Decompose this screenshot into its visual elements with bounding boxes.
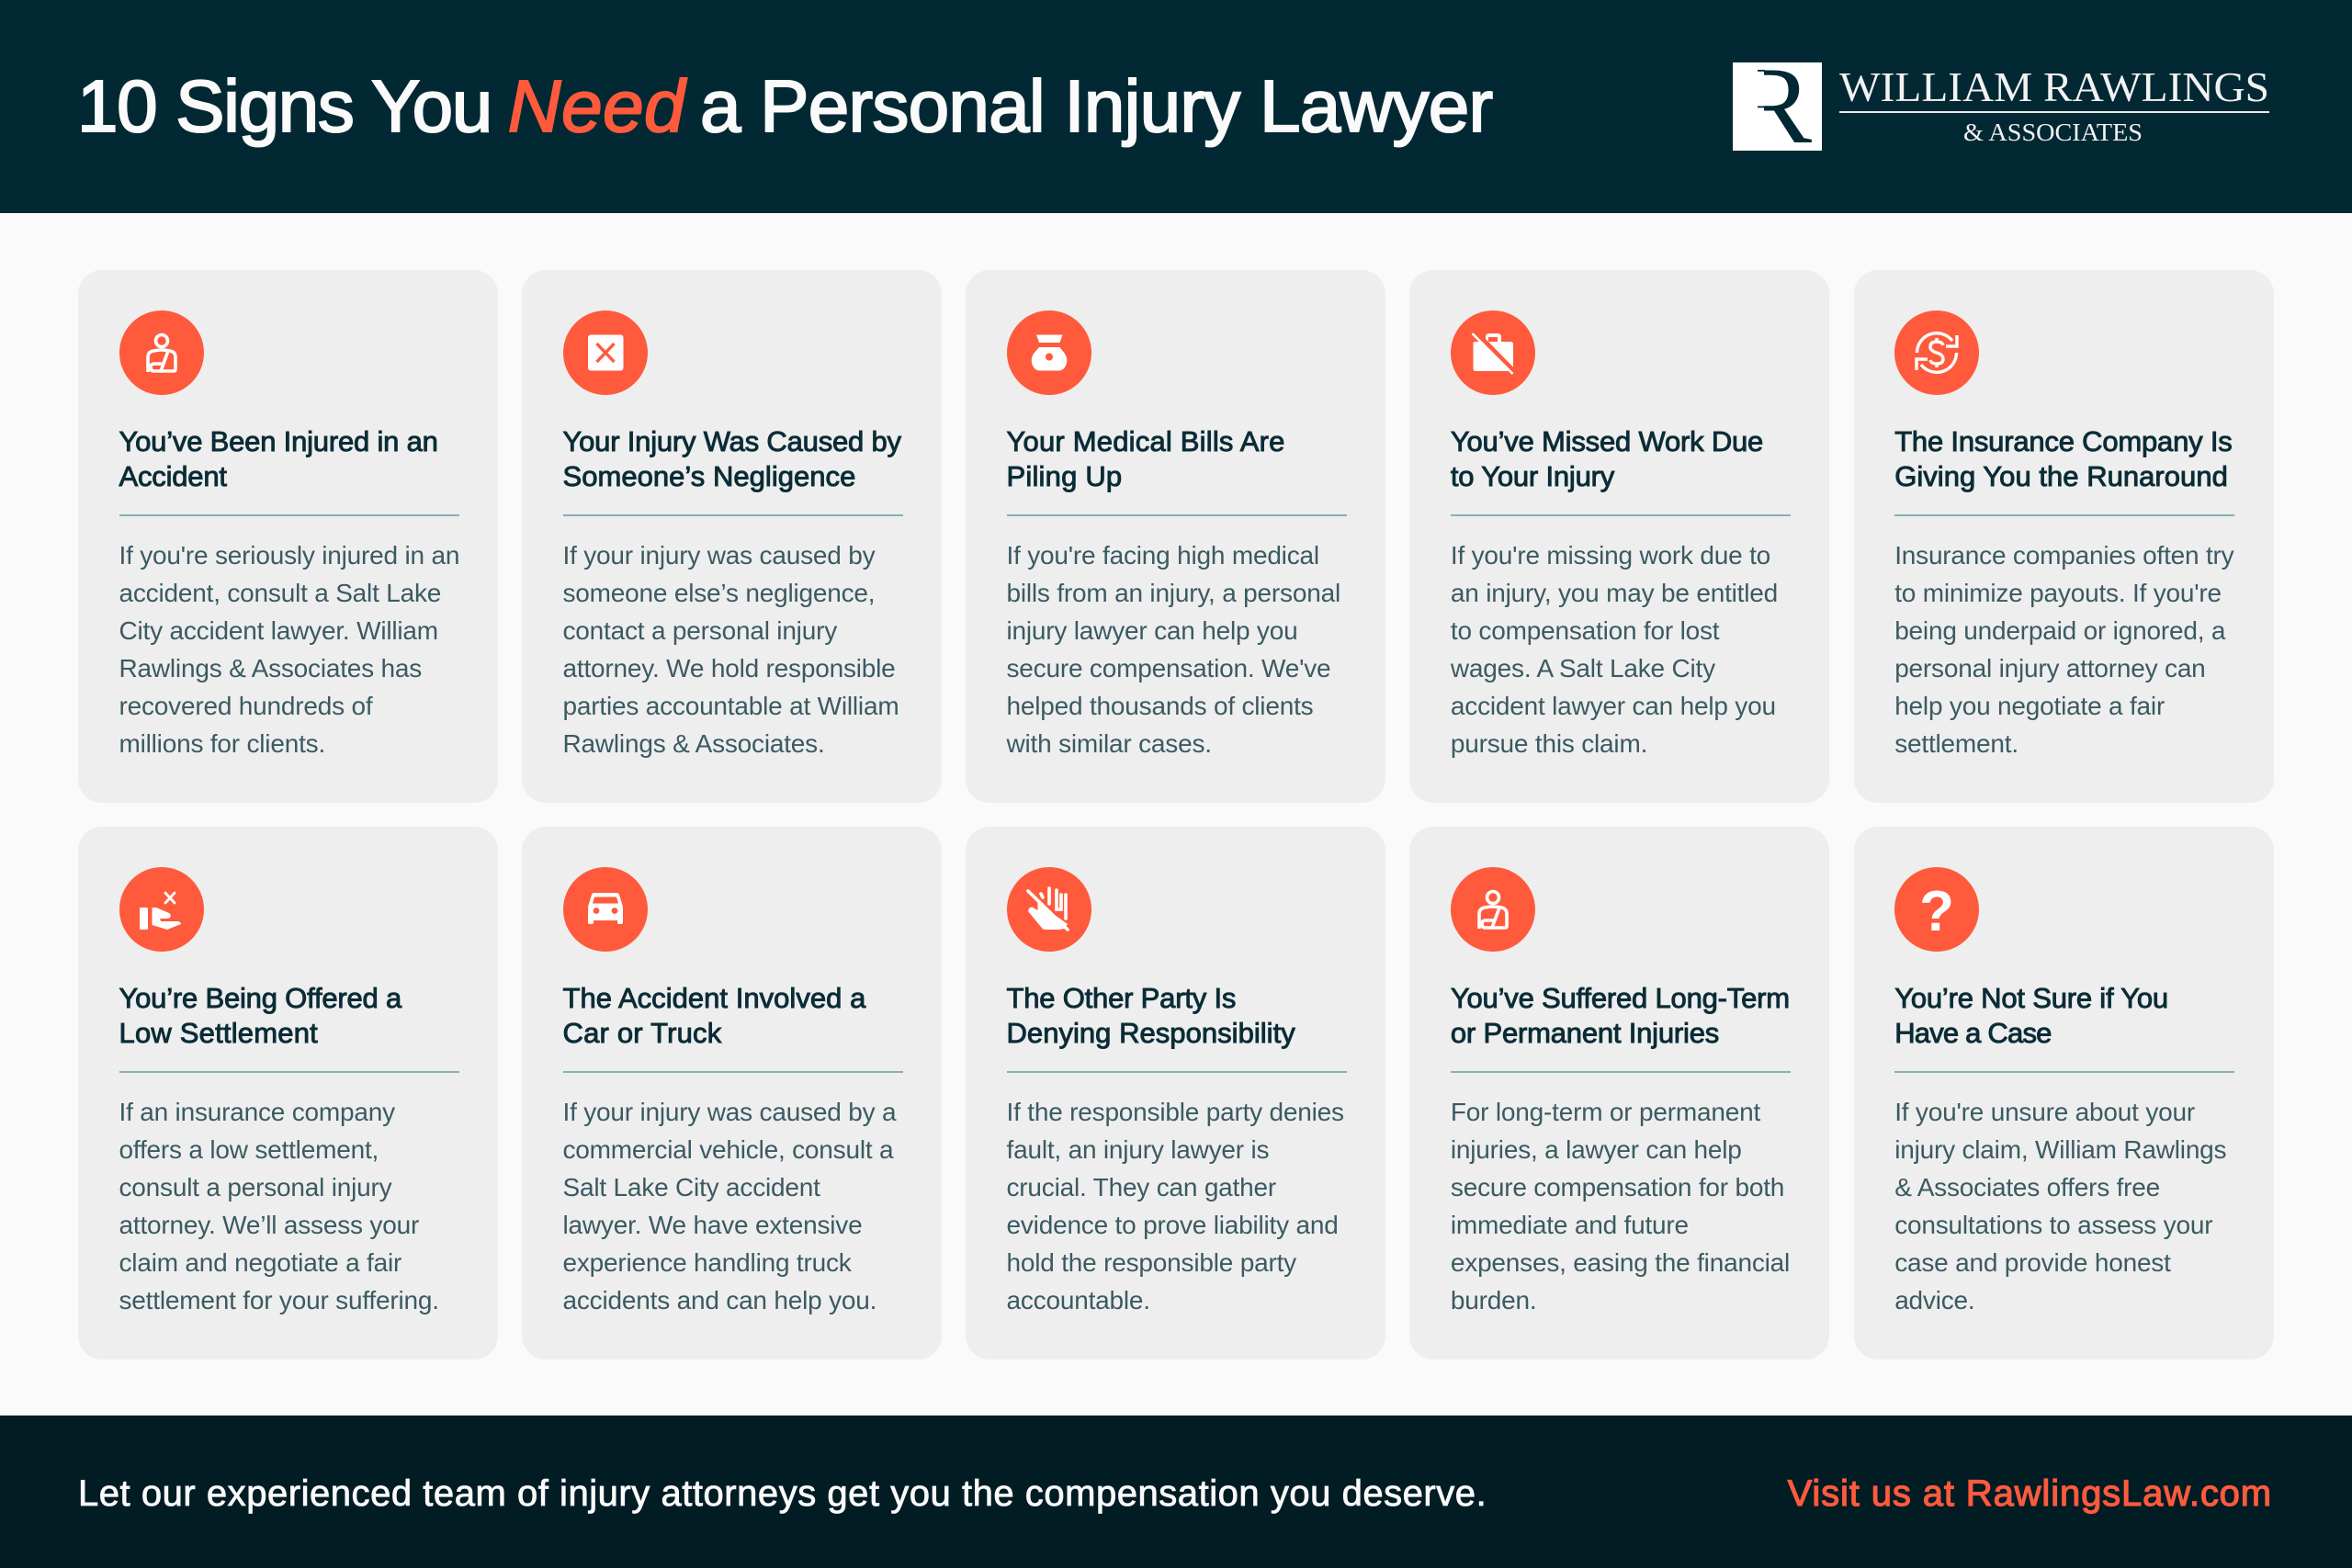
- text block: If you're facing high medical: [1007, 541, 1319, 570]
- heading: You’ve Suffered Long-Term: [1451, 982, 1790, 1014]
- text block: Insurance companies often try: [1894, 541, 2233, 570]
- text block: [562, 1098, 897, 1314]
- icon: x in a box: [563, 310, 648, 395]
- text block: hold the responsible party: [1007, 1248, 1296, 1277]
- text block: If the responsible party denies: [1007, 1098, 1344, 1126]
- text block: accident, consult a Salt Lake: [119, 579, 441, 607]
- footer website link: Visit us at RawlingsLaw.com: [1788, 1473, 2272, 1514]
- heading: You’re Not Sure if You: [1894, 982, 2168, 1014]
- text block: If you're unsure about your: [1894, 1098, 2195, 1126]
- heading: Your Injury Was Caused by: [562, 425, 901, 457]
- heading: The Insurance Company Is: [1894, 425, 2233, 457]
- heading: [1894, 982, 2168, 1049]
- panel: card 9: [1409, 827, 1829, 1359]
- heading: You’re Being Offered a: [119, 982, 401, 1014]
- text block: burden.: [1451, 1286, 1536, 1314]
- text block: wages. A Salt Lake City: [1451, 654, 1715, 682]
- text block: bills from an injury, a personal: [1007, 579, 1340, 607]
- icon: dollar with circular arrows: [1894, 310, 1979, 395]
- text block: lawyer. We have extensive: [562, 1211, 862, 1239]
- text block: accidents and can help you.: [562, 1286, 876, 1314]
- text block: case and provide honest: [1894, 1248, 2171, 1277]
- text block: parties accountable at William: [562, 692, 899, 720]
- text block: & Associates offers free: [1894, 1173, 2160, 1201]
- text block: settlement.: [1894, 729, 2018, 758]
- text block: commercial vehicle, consult a: [562, 1135, 893, 1164]
- text block: [1451, 1098, 1790, 1314]
- heading: Giving You the Runaround: [1894, 460, 2228, 492]
- text block: If you're seriously injured in an: [119, 541, 459, 570]
- text block: claim and negotiate a fair: [119, 1248, 401, 1277]
- heading: [1006, 425, 1285, 492]
- text block: someone else’s negligence,: [562, 579, 875, 607]
- text block: [1007, 1098, 1344, 1314]
- text block: consultations to assess your: [1894, 1211, 2212, 1239]
- text block: For long-term or permanent: [1451, 1098, 1760, 1126]
- heading: Low Settlement: [119, 1017, 318, 1049]
- icon: crossed-out hand: [1007, 867, 1091, 952]
- icon: question mark: [1894, 867, 1979, 952]
- text block: to compensation for lost: [1451, 616, 1719, 645]
- text block: personal injury attorney can: [1894, 654, 2206, 682]
- text block: If you're missing work due to: [1451, 541, 1770, 570]
- text block: Rawlings & Associates has: [119, 654, 422, 682]
- text block: If your injury was caused by a: [562, 1098, 896, 1126]
- icon: person with arm sling: [1451, 867, 1535, 952]
- icon: crossed-out briefcase: [1451, 310, 1535, 395]
- logo: William Rawlings & Associates: WILLIAM RAWLINGS: [1839, 63, 2269, 110]
- logo: William Rawlings & Associates: [1733, 55, 2269, 156]
- heading: [1007, 982, 1295, 1049]
- logo: William Rawlings & Associates: & ASSOCIATES: [1963, 118, 2143, 146]
- text block: injury claim, William Rawlings: [1894, 1135, 2226, 1164]
- heading: You’ve Missed Work Due: [1451, 425, 1763, 457]
- heading: Have a Case: [1894, 1017, 2052, 1049]
- icon: question mark: ?: [1919, 880, 1954, 943]
- icon: hand with x: [119, 867, 204, 952]
- text block: contact a personal injury: [562, 616, 837, 645]
- heading: Piling Up: [1007, 460, 1122, 492]
- heading: Car or Truck: [562, 1017, 721, 1049]
- icon: person with arm sling: [119, 310, 204, 395]
- panel: card 3: [966, 270, 1385, 803]
- text block: accountable.: [1007, 1286, 1150, 1314]
- panel: card 6: [78, 827, 498, 1359]
- text block: injuries, a lawyer can help: [1451, 1135, 1742, 1164]
- panel: card 7: [522, 827, 942, 1359]
- heading: [1450, 982, 1790, 1049]
- text block: [562, 541, 899, 758]
- text block: millions for clients.: [119, 729, 325, 758]
- text block: evidence to prove liability and: [1007, 1211, 1339, 1239]
- text block: an injury, you may be entitled: [1451, 579, 1778, 607]
- text block: [1894, 541, 2234, 758]
- text block: secure compensation. We've: [1007, 654, 1330, 682]
- text block: If an insurance company: [119, 1098, 395, 1126]
- heading: [562, 425, 902, 492]
- text block: [1007, 541, 1340, 758]
- icon: car: [563, 867, 648, 952]
- heading: [118, 425, 438, 492]
- text block: [1450, 541, 1778, 758]
- text block: attorney. We hold responsible: [562, 654, 896, 682]
- heading: [1894, 425, 2233, 492]
- text block: Salt Lake City accident: [562, 1173, 820, 1201]
- text block: City accident lawyer. William: [119, 616, 438, 645]
- text block: offers a low settlement,: [119, 1135, 379, 1164]
- heading: The Other Party Is: [1007, 982, 1236, 1014]
- heading: You’ve Been Injured in an: [119, 425, 438, 457]
- heading: to Your Injury: [1451, 460, 1614, 492]
- text block: crucial. They can gather: [1007, 1173, 1276, 1201]
- text block: settlement for your suffering.: [119, 1286, 439, 1314]
- text block: being underpaid or ignored, a: [1894, 616, 2225, 645]
- text block: pursue this claim.: [1451, 729, 1647, 758]
- heading: Accident: [119, 460, 227, 492]
- text block: attorney. We’ll assess your: [119, 1211, 419, 1239]
- text block: help you negotiate a fair: [1894, 692, 2165, 720]
- header band: [0, 0, 2352, 213]
- heading: The Accident Involved a: [562, 982, 865, 1014]
- text block: [1894, 1098, 2226, 1314]
- text block: with similar cases.: [1007, 729, 1212, 758]
- footer tagline: Let our experienced team of injury attorneys get you the compensation you deserve.: [78, 1473, 1487, 1514]
- panel: card 10: [1854, 827, 2274, 1359]
- heading: Denying Responsibility: [1007, 1017, 1295, 1049]
- heading: [119, 982, 402, 1049]
- panel: card 4: [1409, 270, 1829, 803]
- text block: accident lawyer can help you: [1451, 692, 1776, 720]
- text block: immediate and future: [1451, 1211, 1689, 1239]
- text block: [119, 541, 459, 758]
- panel: card 5: [1854, 270, 2274, 803]
- heading: Your Medical Bills Are: [1007, 425, 1285, 457]
- text block: [119, 1098, 439, 1314]
- text block: secure compensation for both: [1451, 1173, 1784, 1201]
- panel: card 2: [522, 270, 942, 803]
- text block: recovered hundreds of: [119, 692, 372, 720]
- heading: [562, 982, 866, 1049]
- text block: consult a personal injury: [119, 1173, 391, 1201]
- text block: helped thousands of clients: [1007, 692, 1313, 720]
- text block: Rawlings & Associates.: [562, 729, 825, 758]
- footer band: [0, 1416, 2352, 1568]
- text block: experience handling truck: [562, 1248, 852, 1277]
- heading: [1450, 425, 1763, 492]
- heading: Someone’s Negligence: [562, 460, 855, 492]
- icon: money bag: [1007, 310, 1091, 395]
- text block: injury lawyer can help you: [1007, 616, 1297, 645]
- title: 10 Signs You Need a Personal Injury Lawyer: [77, 65, 1492, 147]
- heading: or Permanent Injuries: [1451, 1017, 1719, 1049]
- panel: card 8: [966, 827, 1385, 1359]
- text block: If your injury was caused by: [562, 541, 875, 570]
- panel: card 1: [78, 270, 498, 803]
- text block: expenses, easing the financial: [1451, 1248, 1790, 1277]
- text block: advice.: [1894, 1286, 1975, 1314]
- text block: fault, an injury lawyer is: [1007, 1135, 1269, 1164]
- text block: to minimize payouts. If you're: [1894, 579, 2222, 607]
